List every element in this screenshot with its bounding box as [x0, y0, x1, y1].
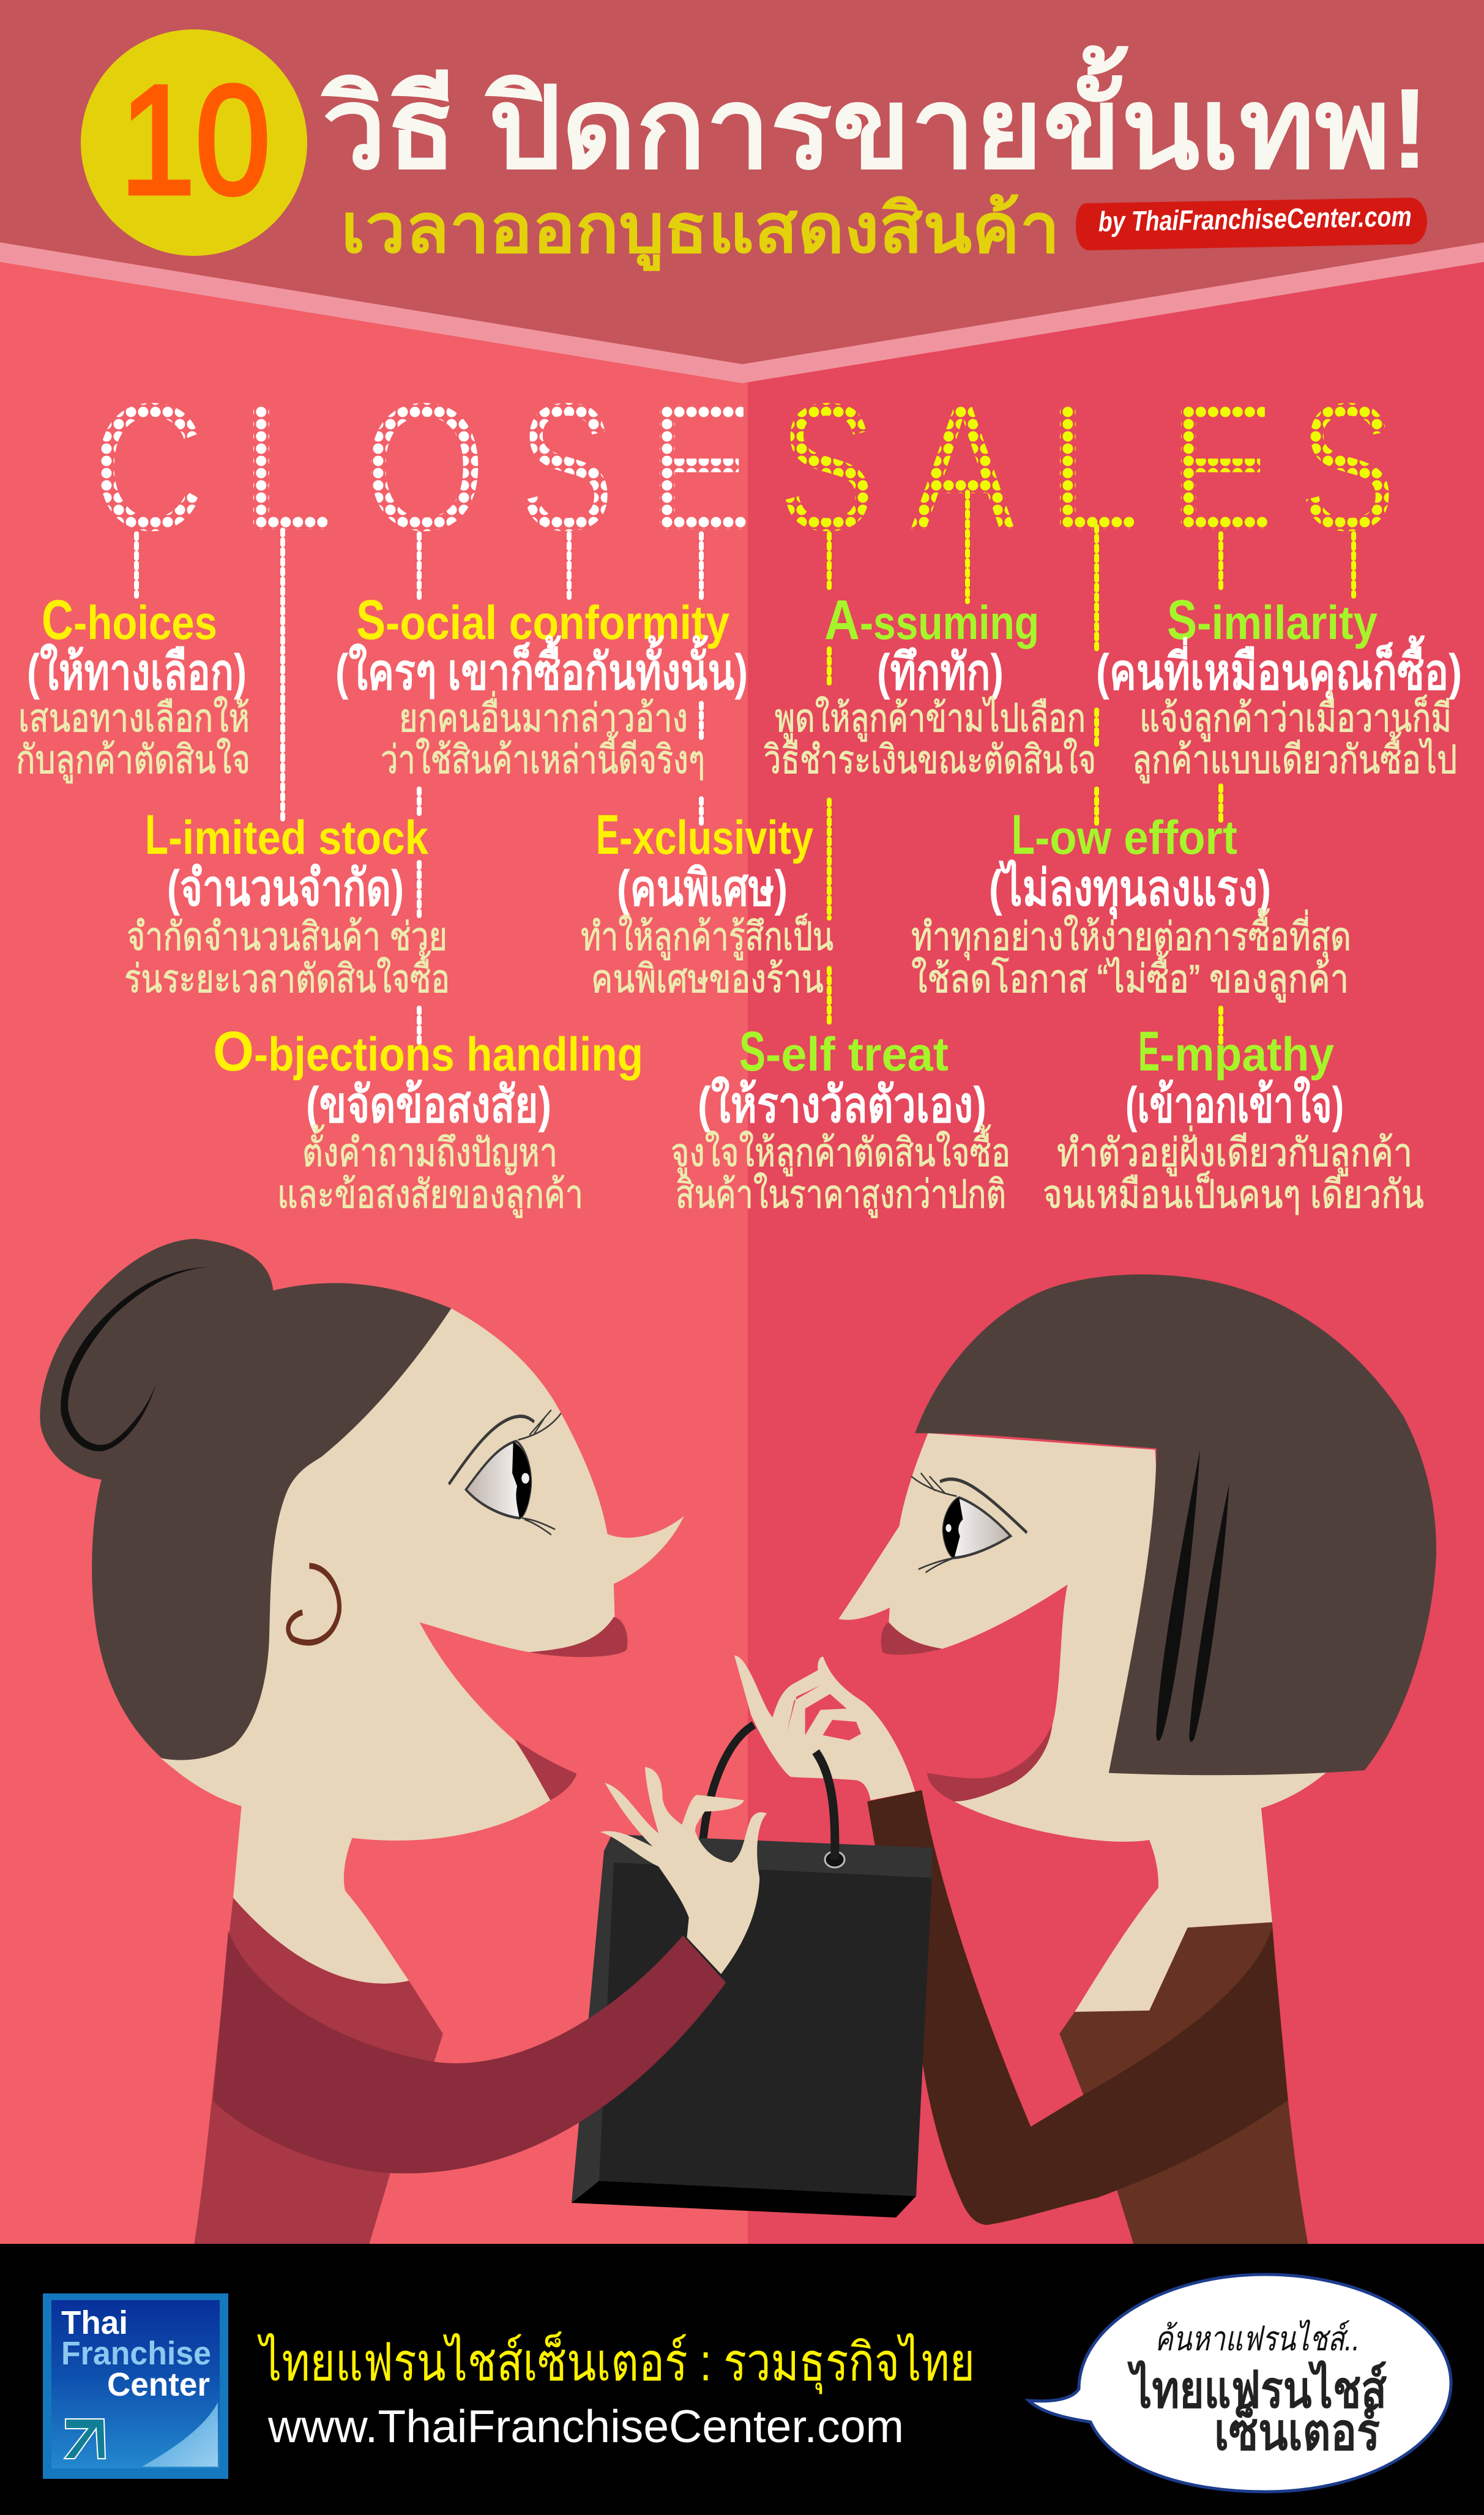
speech bubble: ไทยแฟรนไชส์	[1127, 2360, 1387, 2418]
eye	[911, 1473, 1027, 1572]
skin	[838, 1433, 1327, 2012]
dotted heading: SALES: S	[779, 365, 875, 568]
logo arrow	[64, 2419, 105, 2459]
title: วิธี ปิดการขายขั้นเทพ!	[320, 45, 1429, 192]
dotted heading: SALES	[779, 365, 1395, 568]
item: Objections handling: (ขจัดข้อสงสัย)	[306, 1077, 551, 1133]
dotted heading: SALES: A	[911, 365, 1016, 568]
item: Social conformity: S	[356, 589, 386, 651]
footer url: www.ThaiFranchiseCenter.com	[267, 2401, 904, 2452]
item: Objections handling	[213, 1020, 643, 1218]
byline pill	[1076, 198, 1427, 250]
sleeve	[867, 1790, 1288, 2225]
item: Empathy: -mpathy	[1160, 1027, 1334, 1081]
item: Social conformity: ว่าใช้สินค้าเหล่านี้ดีจริงๆ	[381, 731, 705, 782]
item: Assuming: วิธีชำระเงินขณะตัดสินใจ	[764, 738, 1096, 782]
dotted heading: CLOSE: E	[646, 365, 753, 568]
item: Limited stock	[124, 804, 450, 1001]
illustration: woman on the right	[734, 1274, 1436, 2244]
dotted heading: CLOSE	[91, 365, 753, 568]
lips	[515, 1617, 627, 1800]
item: Limited stock: จำกัดจำนวนสินค้า ช่วย	[127, 914, 447, 959]
item: Self treat: S	[739, 1020, 766, 1083]
item: Empathy: (เข้าอกเข้าใจ)	[1125, 1076, 1344, 1133]
item: Limited stock: L	[145, 804, 168, 866]
bag front	[599, 1863, 932, 2196]
hand	[600, 1767, 767, 1974]
item: Limited stock: ร่นระยะเวลาตัดสินใจซื้อ	[124, 951, 450, 1001]
item: Self treat: จูงใจให้ลูกค้าตัดสินใจซื้อ	[671, 1124, 1010, 1176]
item: Low effort: (ไม่ลงทุนลงแรง)	[989, 859, 1271, 919]
dress	[194, 1897, 443, 2244]
illustration: left woman's hand and arm	[213, 1767, 767, 2173]
illustration: woman on the left, head and torso	[40, 1239, 684, 2244]
item: Social conformity: ยกคนอื่นมากล่าวอ้าง	[399, 691, 688, 740]
item: Similarity: -imilarity	[1197, 596, 1378, 649]
logo	[43, 2293, 228, 2479]
skin	[161, 1309, 684, 1984]
logo wing	[142, 2402, 218, 2467]
sleeve	[213, 1931, 726, 2173]
eyelet	[825, 1852, 845, 1867]
item: Similarity	[1096, 589, 1462, 783]
logo text: Franchise	[61, 2335, 211, 2372]
blouse	[1059, 1923, 1308, 2244]
speech bubble	[1029, 2274, 1451, 2492]
dotted heading: CLOSE: L	[239, 365, 333, 568]
speech bubble: เซ็นเตอร์	[1214, 2401, 1380, 2461]
item: Choices: -hoices	[73, 596, 217, 649]
item: Empathy: E	[1138, 1020, 1160, 1083]
speech bubble: ค้นหาแฟรนไชส์..	[1155, 2319, 1360, 2358]
item: Low effort: ใช้ลดโอกาส “ไม่ซื้อ” ของลูกค้า	[911, 951, 1349, 1003]
item: Exclusivity	[581, 804, 833, 1001]
item: Choices: กับลูกค้าตัดสินใจ	[16, 738, 250, 783]
item: Social conformity: (ใครๆ เขาก็ซื้อกันทั้งนั้น)	[335, 635, 748, 700]
item: Choices: C	[42, 589, 73, 651]
item: Exclusivity: (คนพิเศษ)	[617, 861, 788, 916]
item: Self treat: (ให้รางวัลตัวเอง)	[698, 1076, 986, 1133]
item: Choices	[16, 589, 250, 783]
hair	[40, 1239, 451, 1760]
item: Assuming: (ทึกทัก)	[877, 645, 1004, 700]
footer	[0, 2244, 1484, 2515]
item: Exclusivity: -xclusivity	[619, 810, 813, 864]
item: Empathy: ทำตัวอยู่ฝั่งเดียวกับลูกค้า	[1057, 1126, 1412, 1176]
item: Assuming: A	[824, 589, 860, 651]
item: Similarity: S	[1167, 589, 1197, 651]
hair strands	[1156, 1450, 1229, 1742]
front handle	[816, 1752, 835, 1859]
eye	[449, 1410, 561, 1534]
gaps between fingers	[787, 1686, 861, 1740]
dotted heading: CLOSE: C	[91, 365, 205, 568]
byline pill: by ThaiFranchiseCenter.com	[1098, 200, 1412, 237]
item: Exclusivity: E	[596, 804, 619, 866]
badge: number 10: 10	[120, 53, 270, 226]
hand holding the handle	[734, 1656, 915, 1800]
background: right wall	[748, 0, 1484, 2244]
bag body	[572, 1834, 933, 2203]
item: Empathy: จนเหมือนเป็นคนๆ เดียวกัน	[1043, 1172, 1424, 1216]
item: Objections handling: -bjections handling	[254, 1027, 643, 1081]
logo text: Thai	[61, 2304, 128, 2341]
item: Objections handling: O	[213, 1020, 254, 1083]
item: Low effort: ทำทุกอย่างให้ง่ายต่อการซื้อที่สุด	[911, 908, 1351, 960]
footer tagline: ไทยแฟรนไชส์เซ็นเตอร์ : รวมธุรกิจไทย	[257, 2331, 975, 2394]
item: Choices: เสนอทางเลือกให้	[18, 696, 250, 740]
item: Self treat: -elf treat	[766, 1027, 949, 1081]
lips	[881, 1623, 1053, 1801]
item: Exclusivity: ทำให้ลูกค้ารู้สึกเป็น	[581, 914, 833, 960]
dotted heading: SALES: L	[1046, 365, 1139, 568]
header panel	[0, 0, 1484, 383]
item: Social conformity: -ocial conformity	[386, 596, 729, 649]
rear handle	[703, 1725, 754, 1845]
item: Low effort: L	[1012, 804, 1035, 866]
earring	[288, 1566, 339, 1643]
item: Self treat	[671, 1020, 1010, 1218]
bun line	[61, 1267, 223, 1451]
badge: number 10	[81, 29, 307, 256]
logo text	[61, 2304, 211, 2403]
item: Assuming: -ssuming	[860, 596, 1039, 649]
bag base	[572, 2181, 916, 2218]
item: Objections handling: และข้อสงสัยของลูกค้า	[277, 1172, 583, 1218]
hair	[915, 1274, 1436, 1775]
item: Limited stock: -imited stock	[168, 810, 429, 864]
item: Assuming	[764, 589, 1096, 782]
item: Low effort: -ow effort	[1035, 810, 1237, 864]
background: left wall	[0, 0, 748, 2244]
item: Exclusivity: คนพิเศษของร้าน	[591, 957, 824, 1001]
item: Limited stock: (จำนวนจำกัด)	[167, 861, 404, 916]
item: Objections handling: ตั้งคำถามถึงปัญหา	[302, 1124, 557, 1175]
logo text: Center	[107, 2366, 210, 2403]
connectors: CLOSE letters	[136, 530, 701, 1042]
item: Assuming: พูดให้ลูกค้าข้ามไปเลือก	[775, 696, 1086, 742]
item: Empathy	[1043, 1020, 1424, 1216]
dotted heading: SALES: E	[1168, 365, 1275, 568]
item: Social conformity	[335, 589, 748, 782]
dotted heading: CLOSE: S	[518, 365, 614, 568]
subtitle: เวลาออกบูธแสดงสินค้า	[341, 190, 1060, 271]
dotted heading: CLOSE: O	[364, 365, 486, 568]
dotted heading: SALES: S	[1299, 365, 1395, 568]
shopping bag	[572, 1725, 933, 2218]
item: Low effort	[911, 804, 1351, 1003]
item: Self treat: สินค้าในราคาสูงกว่าปกติ	[676, 1172, 1006, 1218]
item: Choices: (ให้ทางเลือก)	[27, 643, 247, 700]
connectors: SALES letters	[829, 492, 1354, 1042]
